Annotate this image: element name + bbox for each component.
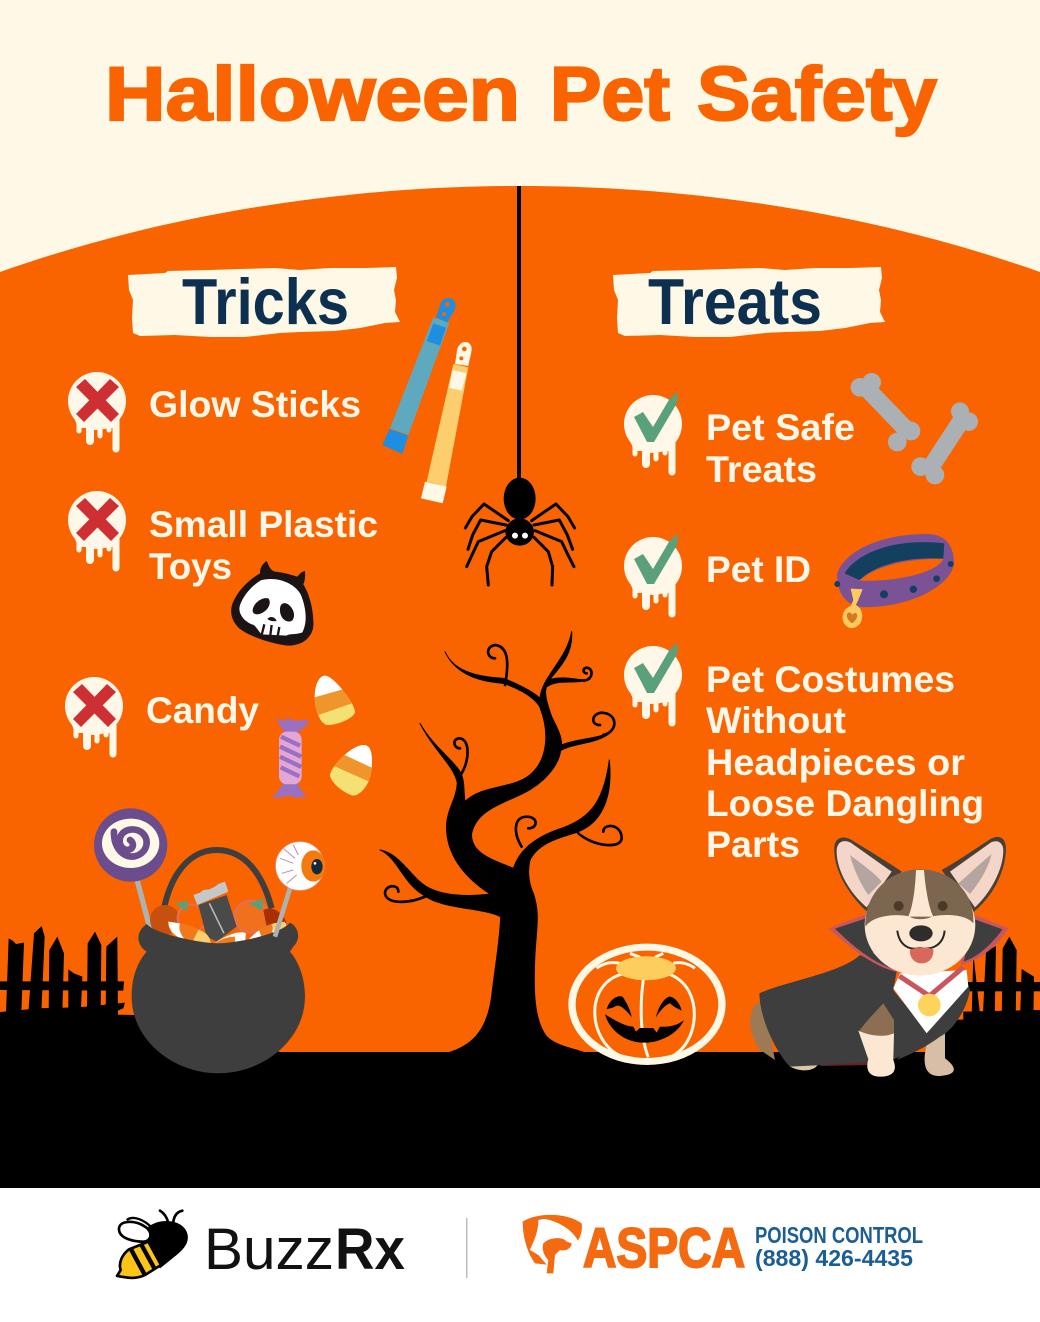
heading: Tricks: Tricks bbox=[182, 265, 349, 338]
chest bbox=[893, 970, 968, 1033]
text: Pet Costumes Without Headpieces or Loose Dangling Parts: Pet Costumes bbox=[706, 659, 955, 700]
logo: ASPCA shield icon bbox=[523, 1215, 582, 1273]
icon: tree bbox=[380, 632, 622, 1053]
icon: corgi in vampire cape bbox=[750, 837, 1009, 1077]
text: Glow Sticks: Glow Sticks bbox=[149, 384, 361, 425]
icon: pet collar bbox=[834, 534, 954, 628]
icon: cross badge toys bbox=[68, 491, 126, 568]
collar bbox=[828, 914, 899, 973]
logo: poison control text: POISON CONTROL bbox=[755, 1222, 923, 1248]
ears bbox=[834, 837, 902, 913]
text: Pet Safe Treats: Treats bbox=[706, 449, 817, 490]
pot bbox=[132, 923, 305, 1073]
icon: cross badge candy bbox=[65, 677, 123, 754]
icon: candy corn and wrapped candy bbox=[272, 668, 377, 798]
icon: check badge treats bbox=[624, 392, 682, 472]
logo: poison control text bbox=[755, 1222, 923, 1271]
text: Small Plastic Toys bbox=[149, 504, 378, 587]
icon: glow sticks bbox=[382, 298, 472, 503]
tail bbox=[750, 1000, 775, 1060]
title: Pet bbox=[550, 52, 670, 137]
logo: BuzzRx wordmark bbox=[204, 1217, 405, 1282]
icon: check badge costumes bbox=[624, 643, 682, 723]
heading: Treats: Treats bbox=[648, 265, 822, 338]
text: Candy: Candy bbox=[146, 690, 259, 731]
lollipop bbox=[94, 808, 167, 935]
footer: white band bbox=[0, 1188, 1040, 1322]
eyeball lollipop bbox=[275, 842, 325, 937]
text: Pet Costumes Without Headpieces or Loose Dangling Parts: Headpieces or bbox=[706, 742, 965, 783]
fence right bbox=[963, 937, 1040, 1027]
cape lining bbox=[820, 1033, 870, 1066]
text: Pet ID: Pet ID bbox=[706, 549, 811, 590]
text: Pet Costumes Without Headpieces or Loose Dangling Parts: Loose Dangling bbox=[706, 783, 984, 824]
text: Pet Costumes Without Headpieces or Loose Dangling Parts: Parts bbox=[706, 824, 800, 865]
title bbox=[105, 52, 937, 137]
ground silhouette bbox=[0, 1013, 1040, 1188]
spider thread bbox=[517, 186, 521, 486]
icon: cross badge glow sticks bbox=[68, 372, 126, 449]
icon: bones bbox=[851, 373, 978, 484]
title: Halloween bbox=[105, 52, 520, 137]
text: Small Plastic Toys: Small Plastic bbox=[149, 504, 378, 545]
candy bag bbox=[198, 895, 237, 942]
head bbox=[865, 874, 975, 976]
back paw bbox=[790, 1058, 819, 1070]
logo: BuzzRx wordmark: Rx bbox=[335, 1217, 405, 1282]
text: Small Plastic Toys: Toys bbox=[149, 546, 232, 587]
logo: ASPCA wordmark: ASPCA bbox=[583, 1216, 745, 1279]
icon: cauldron with candy bbox=[94, 808, 325, 1073]
icon: skull toy bbox=[231, 561, 313, 646]
text: Pet Costumes Without Headpieces or Loose Dangling Parts: Without bbox=[706, 700, 846, 741]
heading: Tricks bbox=[128, 265, 400, 338]
background: orange arc panel bbox=[0, 186, 1040, 1100]
icon: jack-o-lantern pumpkin bbox=[568, 944, 726, 1065]
candy corn pile bbox=[168, 922, 211, 943]
divider bbox=[466, 1218, 467, 1278]
text: Pet Safe Treats bbox=[706, 407, 855, 490]
text: Pet Costumes Without Headpieces or Loose Dangling Parts bbox=[706, 659, 984, 865]
icon: check badge pet id bbox=[624, 534, 682, 614]
cape bbox=[759, 955, 927, 1067]
logo: bee icon bbox=[117, 1211, 188, 1278]
logo: BuzzRx wordmark: Buzz bbox=[204, 1217, 334, 1282]
logo: poison control text: (888) 426-4435 bbox=[755, 1245, 913, 1271]
fence left bbox=[0, 926, 133, 1027]
far leg bbox=[925, 1033, 954, 1076]
title: Safety bbox=[697, 52, 937, 137]
icon: spider bbox=[465, 478, 575, 585]
text: Pet Safe Treats: Pet Safe bbox=[706, 407, 855, 448]
haunch and front leg bbox=[859, 1003, 894, 1038]
